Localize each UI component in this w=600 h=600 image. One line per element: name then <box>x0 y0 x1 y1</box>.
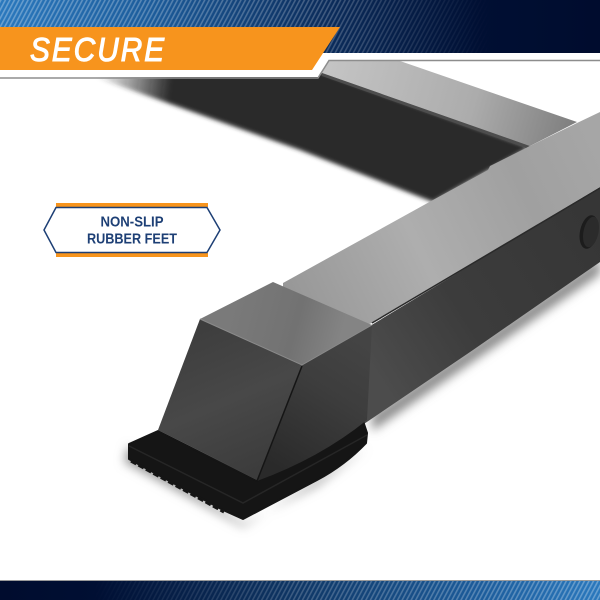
white ribbon under banners <box>0 53 600 77</box>
callout text <box>87 214 177 248</box>
foot lip highlight <box>129 435 367 503</box>
foot cap edges <box>200 319 372 365</box>
back crossbar top surface <box>322 61 577 146</box>
ribbon grey edge <box>0 60 600 78</box>
title: SECURE <box>30 32 166 68</box>
top banner: striped navy band <box>0 0 600 53</box>
bottom banner: striped navy band <box>0 580 600 600</box>
main bar side face <box>355 187 600 430</box>
foot cap front face <box>158 319 302 480</box>
main bar top surface <box>283 112 600 335</box>
back crossbar edge highlight <box>322 73 530 148</box>
bolt <box>577 214 600 250</box>
foot floor shadow <box>124 446 367 527</box>
foot cap right face <box>257 325 372 481</box>
foot grip teeth <box>131 461 224 512</box>
foot cap top face <box>200 282 372 365</box>
orange title banner <box>0 27 340 70</box>
back crossbar dark underside <box>92 72 530 202</box>
callout: non-slip rubber feet <box>44 203 220 257</box>
rubber foot base <box>129 421 367 519</box>
main bar ridge line <box>372 188 600 323</box>
bar floor shadow <box>372 258 600 431</box>
callout text: RUBBER FEET <box>87 230 177 248</box>
product photo: bench frame with rubber foot <box>92 61 600 527</box>
callout hexagon outline <box>44 208 220 252</box>
foot cap corner line <box>257 366 302 481</box>
callout orange bars <box>56 203 208 257</box>
callout text: NON-SLIP <box>100 214 164 230</box>
